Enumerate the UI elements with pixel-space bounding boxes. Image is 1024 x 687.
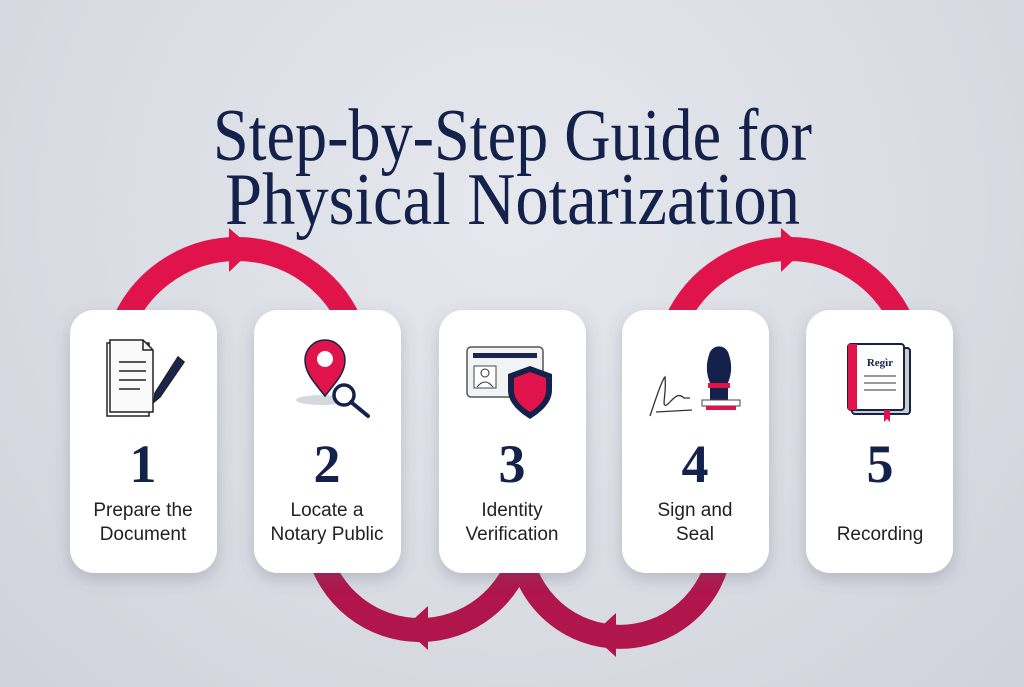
number 1: 1	[130, 434, 156, 494]
panel: step 1	[70, 310, 217, 573]
panel: step 2	[254, 310, 401, 573]
panel: step 2: Notary Public	[270, 524, 384, 545]
title: Physical Notarization	[225, 159, 800, 241]
icon: signature and stamp	[650, 346, 740, 416]
number 5: 5	[866, 434, 894, 494]
icon: register book	[848, 344, 910, 422]
label: Sign and	[657, 500, 733, 521]
icon: map pin with magnifier	[296, 340, 368, 416]
panel: step 3	[439, 310, 586, 573]
title: Step-by-Step Guide for	[213, 95, 812, 177]
number 2: 2	[314, 434, 340, 494]
label: Recording	[837, 524, 923, 545]
panel: step 4	[622, 310, 769, 573]
arrow: top arc 4 to 5	[676, 228, 902, 322]
icon: document with pen	[107, 340, 184, 416]
icon: register book: Regìr	[867, 357, 893, 369]
panel: step 4: Seal	[676, 524, 714, 545]
panel: step 1: Document	[100, 524, 187, 545]
icon: ID card with shield	[467, 347, 552, 419]
number 3: 3	[498, 434, 526, 494]
title	[213, 95, 812, 241]
label: Prepare the	[93, 500, 193, 521]
arrow: bottom arc 3 to 2	[318, 550, 522, 650]
label: Locate a	[291, 500, 364, 521]
panel: step 3: Verification	[466, 524, 558, 545]
panel: step 5	[806, 310, 953, 573]
number 4: 4	[682, 434, 708, 494]
label: Identity	[481, 500, 543, 521]
arrow: bottom arc 4 to 3	[520, 550, 720, 657]
arrow: top arc 1 to 2	[124, 228, 350, 322]
